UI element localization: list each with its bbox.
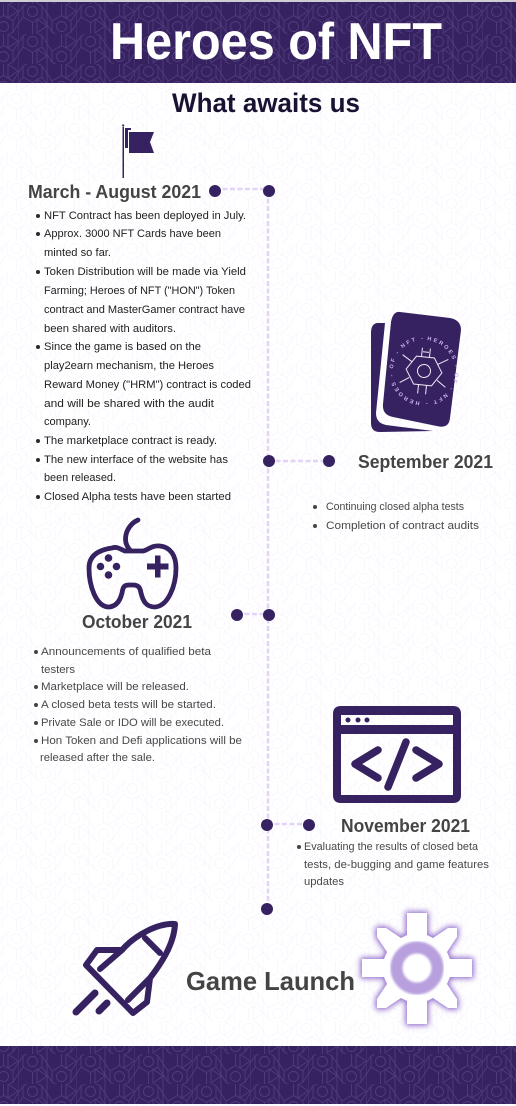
timeline: [209, 185, 335, 915]
icon: NFT cards: [371, 312, 461, 432]
text block: March - August 2021 items: Token Distribution will be made via Yield: [44, 266, 246, 278]
text block: March - August 2021 items: Since the game is based on the: [44, 341, 201, 353]
text block: October 2021 items: Private Sale or IDO will be executed.: [41, 717, 224, 729]
text block: October 2021 items: [34, 646, 242, 764]
text block: November 2021 items: Evaluating the results of closed beta: [304, 841, 478, 853]
text block: March - August 2021 items: been released.: [44, 472, 116, 484]
text block: October 2021 items: testers: [41, 664, 76, 676]
text block: November 2021 items: updates: [304, 876, 345, 888]
text block: September 2021 items: Continuing closed alpha tests: [326, 501, 465, 513]
icon: flag: [122, 124, 154, 178]
heading: November 2021: November 2021: [341, 816, 470, 836]
heading: Game Launch: Game Launch: [186, 966, 355, 996]
heading: October 2021: October 2021: [82, 612, 192, 632]
heading: September 2021: September 2021: [358, 452, 493, 472]
text block: March - August 2021 items: Approx. 3000 NFT Cards have been: [44, 228, 221, 240]
top header band: [0, 0, 516, 83]
text block: October 2021 items: Announcements of qualified beta: [41, 646, 211, 658]
text block: September 2021 items: Completion of contract audits: [326, 520, 480, 532]
text block: October 2021 items: Hon Token and Defi applications will be: [41, 735, 242, 747]
text block: November 2021 items: tests, de-bugging and game features: [304, 859, 490, 871]
card emblem: HEROES - OF - NFT - HEROES - OF - NFT -: [390, 336, 458, 406]
text block: October 2021 items: released after the sale.: [40, 752, 155, 764]
text block: November 2021 items: [297, 841, 490, 888]
text block: October 2021 items: A closed beta tests will be started.: [41, 699, 216, 711]
bottom footer band: [0, 1046, 516, 1104]
title: Heroes of NFT: [110, 13, 442, 71]
text block: March - August 2021 items: minted so far.: [44, 247, 111, 259]
icon: glowing gear: [362, 913, 472, 1024]
text block: September 2021 items: [313, 501, 480, 532]
text block: March - August 2021 items: company.: [44, 416, 91, 428]
text block: March - August 2021 items: The marketplace contract is ready.: [44, 435, 217, 447]
icon: game controller: [89, 520, 176, 607]
text block: March - August 2021 items: The new interface of the website has: [44, 454, 229, 466]
text block: March - August 2021 items: Closed Alpha tests have been started: [44, 491, 231, 503]
text block: March - August 2021 items: [36, 210, 251, 503]
text block: October 2021 items: Marketplace will be released.: [41, 681, 189, 693]
subtitle: What awaits us: [172, 88, 360, 118]
heading: March - August 2021: March - August 2021: [28, 182, 201, 202]
icon: code window: [333, 706, 461, 803]
text block: March - August 2021 items: and will be shared with the audit: [44, 398, 214, 410]
icon: rocket: [76, 924, 175, 1013]
text block: March - August 2021 items: Farming; Heroes of NFT ("HON") Token: [44, 285, 235, 297]
text block: March - August 2021 items: contract and MasterGamer contract have: [44, 304, 245, 316]
text block: March - August 2021 items: been shared with auditors.: [44, 323, 176, 335]
text block: March - August 2021 items: play2earn mechanism, the Heroes: [44, 360, 215, 372]
text block: March - August 2021 items: NFT Contract has been deployed in July.: [44, 210, 246, 222]
text block: March - August 2021 items: Reward Money ("HRM") contract is coded: [44, 379, 251, 391]
